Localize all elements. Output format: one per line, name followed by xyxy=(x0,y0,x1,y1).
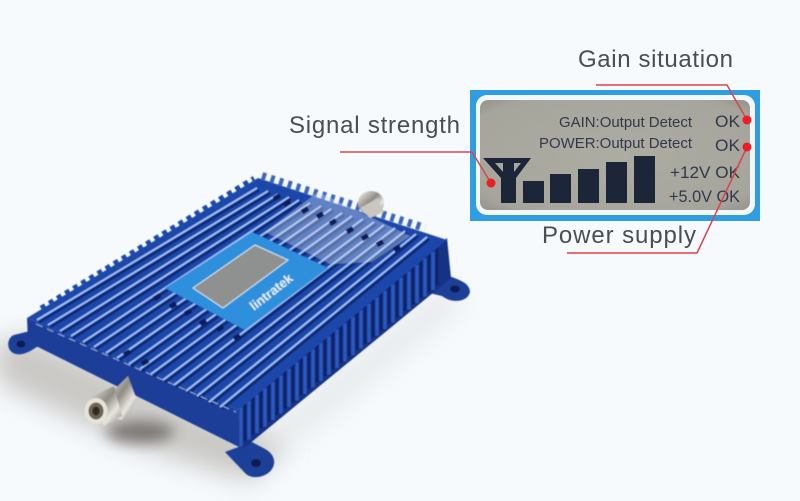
white bezel xyxy=(476,95,755,215)
ear holes xyxy=(16,286,460,467)
translucent sticker glare xyxy=(265,192,410,264)
lcd screen xyxy=(193,245,288,308)
status text lines: POWER:Output Detect xyxy=(539,136,692,152)
lcd detail panel xyxy=(470,90,760,221)
signal antenna icon xyxy=(483,158,531,203)
signal booster device xyxy=(8,176,470,477)
signal bars xyxy=(523,156,655,203)
back tooth edge xyxy=(262,176,425,228)
rib highlights xyxy=(37,188,427,407)
status text lines: OK xyxy=(715,112,741,131)
status text lines: +12V OK xyxy=(670,163,741,182)
blue frame xyxy=(470,90,760,221)
brand text: lintratek xyxy=(247,270,296,313)
front face xyxy=(27,318,243,449)
callout: signal strength: Signal strength xyxy=(289,112,460,139)
lcd background xyxy=(480,100,750,210)
left tooth edge xyxy=(42,180,255,310)
callout: gain situation xyxy=(578,46,752,124)
blue label plate xyxy=(165,232,328,330)
top face xyxy=(27,178,447,410)
callout: power supply: Power supply xyxy=(542,222,696,249)
device shadow xyxy=(0,285,465,482)
rear connector xyxy=(358,191,384,218)
callout: power supply xyxy=(542,142,752,253)
status text lines: GAIN:Output Detect xyxy=(559,115,692,131)
status text lines xyxy=(539,112,741,206)
rib shadows xyxy=(39,190,429,409)
status text lines: OK xyxy=(715,136,741,155)
status text lines: +5.0V OK xyxy=(669,187,741,206)
front n-type connector xyxy=(84,376,136,426)
front edge dashes xyxy=(36,324,236,412)
side face with fins xyxy=(238,238,451,449)
callout: gain situation: Gain situation xyxy=(578,46,733,73)
callout: signal strength xyxy=(289,112,496,188)
mounting ears xyxy=(8,272,470,477)
rib notches xyxy=(124,195,400,364)
